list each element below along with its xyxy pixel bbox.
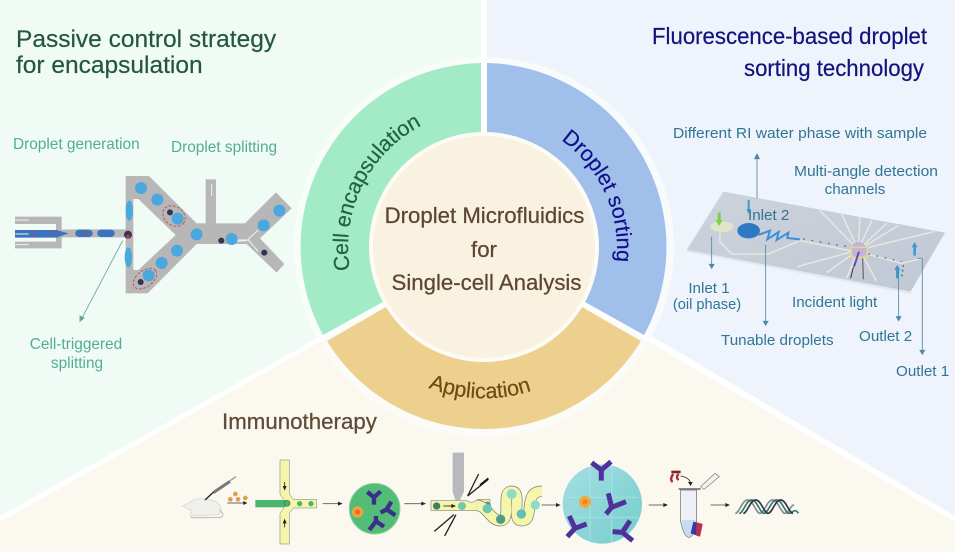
immunotherapy workflow right <box>477 462 798 544</box>
panel: droplet sorting background <box>487 0 955 516</box>
labels: droplet sorting diagram: Different RI water phase with sample <box>673 125 927 142</box>
elongated droplets <box>75 230 115 237</box>
icon: DNA strands <box>735 500 798 513</box>
central ring diagram <box>300 60 666 437</box>
labels: droplet sorting diagram: Outlet 1 <box>896 363 949 380</box>
green arrow <box>716 213 723 226</box>
center title <box>385 203 584 295</box>
icon: mouse and syringe <box>183 477 236 518</box>
label: cell encapsulation: Cell encapsulation <box>332 117 421 270</box>
heading: fluorescence-based droplet sorting <box>652 23 927 81</box>
outlet dots <box>901 265 904 276</box>
labels: droplet sorting diagram: Inlet 2 <box>748 207 789 224</box>
icon: droplet with antibodies <box>349 483 400 534</box>
label: application: Application <box>428 376 530 400</box>
arrow <box>649 503 668 507</box>
labels: passive control diagram: Droplet generation <box>13 136 140 153</box>
panel: passive control background <box>0 0 481 516</box>
labels: droplet sorting diagram: (oil phase) <box>673 297 741 313</box>
ring segment: cell encapsulation <box>301 63 481 335</box>
labels: passive control diagram <box>13 136 277 372</box>
detection zone <box>851 242 867 278</box>
ring segment: droplet sorting <box>487 63 666 335</box>
labels: droplet sorting diagram <box>673 125 949 380</box>
immunotherapy workflow left <box>183 453 491 544</box>
labels: passive control diagram: splitting <box>51 355 103 372</box>
tunable droplet stream <box>737 223 902 262</box>
heading: passive control strategy: for encapsulation <box>16 52 203 79</box>
leader arrows <box>709 154 925 354</box>
heading: fluorescence-based droplet sorting: Fluorescence-based droplet <box>652 23 927 49</box>
icon: flow-focusing junction <box>255 460 317 544</box>
arrow <box>542 503 561 507</box>
chip body <box>687 192 945 292</box>
icon: sorting channel with electrodes <box>431 453 491 536</box>
icon: tube with cap and reagent <box>671 471 719 537</box>
labels: droplet sorting diagram: Tunable droplets <box>721 332 834 349</box>
splitting droplets <box>125 182 285 281</box>
center title: for <box>471 237 498 262</box>
labels: droplet sorting diagram: Incident light <box>792 294 878 311</box>
chip channels <box>126 176 292 293</box>
icon: hydrogel sphere with antibodies <box>563 462 642 544</box>
label: droplet sorting: Droplet sorting <box>562 129 632 262</box>
arrow <box>711 503 730 507</box>
labels: droplet sorting diagram: Outlet 2 <box>859 328 912 345</box>
labels: droplet sorting diagram: channels <box>825 181 886 198</box>
labels: droplet sorting diagram: Multi-angle detection <box>794 163 938 180</box>
labels: droplet sorting diagram: Inlet 1 <box>688 280 730 297</box>
cells <box>124 209 267 285</box>
inlet reservoir <box>710 221 734 232</box>
heading: immunotherapy: Immunotherapy <box>222 409 378 434</box>
inlet junction <box>15 217 127 248</box>
diagram: droplet generation and splitting chip <box>15 176 292 321</box>
radiating detection channels <box>720 211 935 281</box>
heading: passive control strategy <box>16 26 277 79</box>
arrow <box>404 502 426 506</box>
labels: passive control diagram: Cell-triggered <box>30 336 122 353</box>
ring segment: application <box>327 307 641 429</box>
center title: Droplet Microfluidics <box>385 203 584 228</box>
heading: fluorescence-based droplet sorting: sorting technology <box>744 55 924 81</box>
center circle <box>371 134 597 360</box>
diagram: multi-angle detection chip <box>687 154 945 354</box>
heading: passive control strategy: Passive control strategy <box>16 26 277 53</box>
outlet arrows <box>746 200 918 278</box>
icon: serpentine incubation channel <box>477 478 545 527</box>
arrow: cell-triggered splitting <box>80 241 123 321</box>
icon: cells and arrow <box>227 492 248 505</box>
labels: passive control diagram: Droplet splitting <box>171 139 277 156</box>
arrow <box>323 502 343 506</box>
dashed highlight rings <box>130 201 189 293</box>
flow arrows and blue stream <box>15 184 258 252</box>
center title: Single-cell Analysis <box>392 270 581 295</box>
panel: application background <box>0 250 955 552</box>
